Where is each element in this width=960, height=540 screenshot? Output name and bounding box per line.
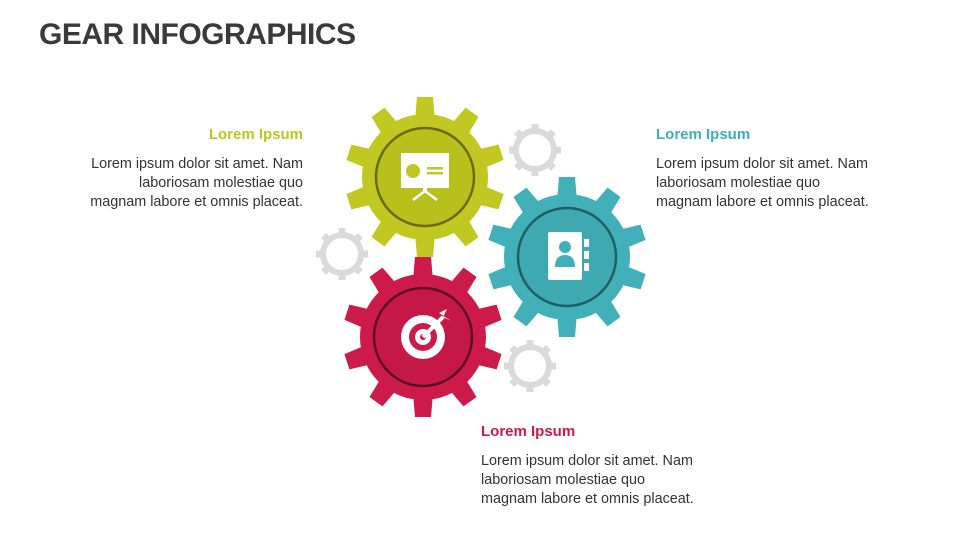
text block: teal: Lorem ipsum dolor sit amet. Nam — [656, 156, 868, 172]
gear: teal — [488, 177, 646, 337]
gear: green — [346, 97, 504, 257]
icon: contact book — [548, 232, 589, 280]
small gray gear top — [509, 124, 561, 176]
gear: red — [344, 257, 502, 417]
text block: red: Lorem Ipsum — [481, 423, 575, 440]
text block: teal: magnam labore et omnis placeat. — [656, 194, 869, 210]
text block: green: laboriosam molestiae quo — [139, 175, 303, 191]
text block: red: magnam labore et omnis placeat. — [481, 491, 694, 507]
icon: presentation board — [401, 153, 449, 200]
text block: green: Lorem ipsum dolor sit amet. Nam — [91, 156, 303, 172]
text block: teal: laboriosam molestiae quo — [656, 175, 820, 191]
text block: red — [481, 423, 694, 507]
text block: red: laboriosam molestiae quo — [481, 472, 645, 488]
text block: green: magnam labore et omnis placeat. — [90, 194, 303, 210]
text block: red: Lorem ipsum dolor sit amet. Nam — [481, 453, 693, 469]
small gray gear bottom — [504, 340, 556, 392]
text block: teal: Lorem Ipsum — [656, 126, 750, 143]
text block: green — [90, 126, 303, 210]
text block: green: Lorem Ipsum — [209, 126, 303, 143]
title: GEAR INFOGRAPHICS — [39, 18, 356, 51]
text block: teal — [656, 126, 869, 210]
small gray gear left — [316, 228, 368, 280]
icon: target with arrow — [401, 309, 451, 359]
